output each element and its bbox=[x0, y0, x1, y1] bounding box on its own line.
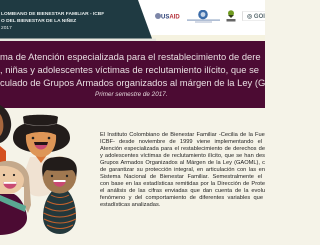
title text: , niñas y adolescentes víctimas de reclutamiento ilícito, que se bbox=[0, 64, 259, 75]
description paragraph: el análisis de las cifras enviadas que dan cuenta de la evolu bbox=[100, 188, 265, 194]
header band bbox=[0, 0, 265, 41]
description paragraph: El Instituto Colombiano de Bienestar Familiar -Cecilia de la Fuen bbox=[100, 132, 265, 138]
description paragraph: estadísticas analizadas. bbox=[100, 202, 160, 208]
subtitle: Primer semestre de 2017. bbox=[95, 91, 167, 98]
logo: OIM bbox=[187, 10, 220, 22]
description paragraph: y adolescentes víctimas de reclutamiento ilícito, que se han des bbox=[100, 152, 265, 158]
title band bbox=[0, 41, 265, 108]
title text: ma de Atención especializada para el restablecimiento de dere bbox=[0, 51, 261, 62]
description paragraph: Atención especializada para el restablecimiento de derechos de bbox=[100, 146, 265, 152]
description paragraph: fenómeno y del comportamiento de diferentes variables que bbox=[100, 194, 263, 200]
logo: GOV: ◎ GOI bbox=[247, 14, 265, 20]
title text: culado de Grupos Armados organizados al márgen de la Ley (G bbox=[0, 77, 265, 88]
title text bbox=[0, 51, 265, 88]
description paragraph: ICBF- desde noviembre de 1999 viene implementando el bbox=[100, 138, 262, 144]
logo: ICBF bbox=[226, 10, 236, 22]
figure: man in hat bbox=[13, 115, 70, 196]
figure: left partial bbox=[0, 105, 11, 165]
illustration: figures bbox=[0, 105, 77, 235]
description paragraph: Sistema Nacional de Bienestar Familiar. Semestralmente el bbox=[100, 174, 262, 180]
logo: GOV bbox=[242, 11, 265, 21]
description paragraph: Grupos Armados Organizados al Márgen de la Ley (GAOML), c bbox=[100, 160, 265, 166]
header organisation text: LOMBIANO DE BIENESTAR FAMILIAR - ICBF bbox=[1, 12, 104, 17]
logos bbox=[155, 10, 265, 22]
figure: woman bbox=[0, 161, 31, 235]
description paragraph bbox=[100, 132, 265, 208]
description paragraph: de garantizar su protección integral, en articulación con las en bbox=[100, 166, 265, 172]
figure: boy in striped shirt bbox=[42, 156, 77, 234]
logo: USAID: USAID bbox=[161, 14, 180, 20]
description paragraph: con base en las estadísticas remitidas por la Dirección de Prote bbox=[100, 180, 265, 186]
header organisation text: O DEL BIENESTAR DE LA NIÑEZ bbox=[1, 19, 76, 24]
logo: USAID bbox=[155, 13, 180, 20]
header organisation text: 2017 bbox=[1, 26, 12, 31]
header organisation text bbox=[1, 12, 104, 31]
